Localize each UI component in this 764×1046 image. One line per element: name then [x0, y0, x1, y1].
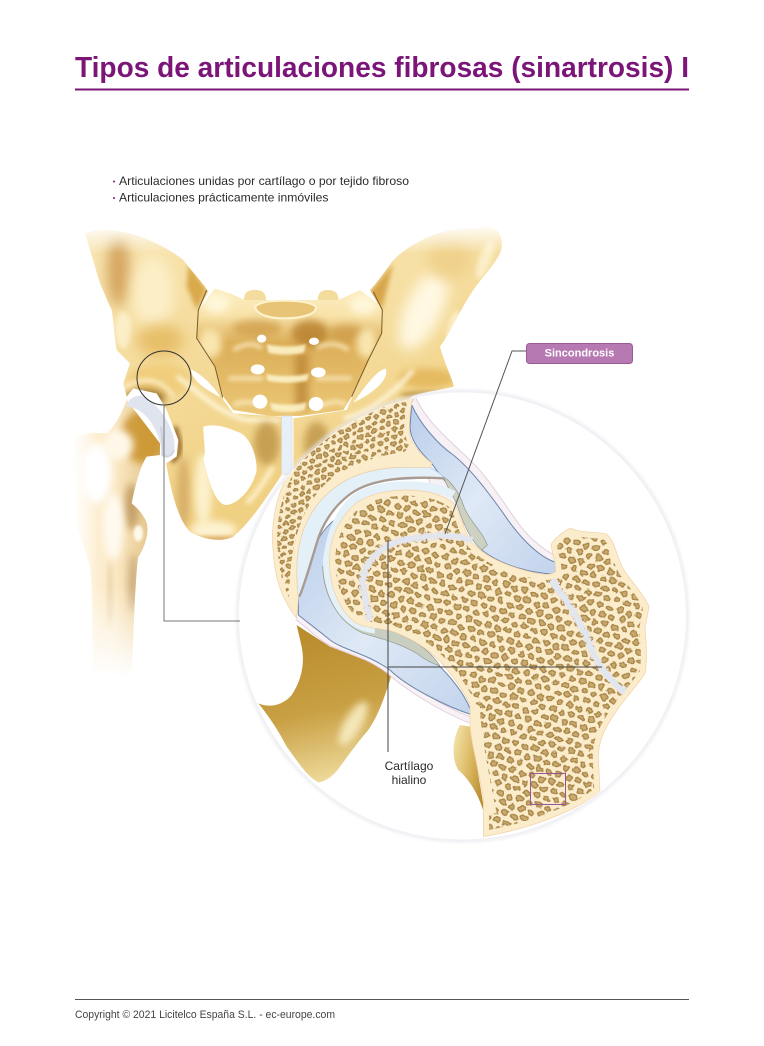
- left hip bone: [85, 230, 282, 540]
- connector: locator to zoom circle: [164, 405, 240, 621]
- ischium section: [258, 625, 392, 782]
- pubic symphysis cartilage: [282, 416, 292, 475]
- footer: Copyright © 2021 Licitelco España S.L. - ec-europe.com: [75, 1009, 335, 1021]
- title: Tipos de articulaciones fibrosas (sinartrosis) I: [75, 52, 689, 84]
- femoral head cartilage: [327, 486, 453, 629]
- label: cartilago hialino: hialino: [392, 773, 427, 787]
- sacral foramina: [251, 335, 326, 411]
- left sacroiliac gap: [191, 369, 221, 397]
- lesser trochanter: [454, 725, 483, 810]
- capsule upper outline: [407, 396, 558, 567]
- synovial lower: [323, 563, 440, 666]
- label: cartilago hialino: Cartílago: [385, 759, 434, 773]
- connector: sincondrosis: [445, 351, 526, 534]
- pelvis and femur illustration: [70, 220, 513, 683]
- zoom circle: [238, 392, 687, 840]
- label: cartilago hialino: [385, 759, 434, 787]
- detail square: [530, 774, 566, 804]
- bullet list: [113, 174, 409, 204]
- capsule lower outline: [297, 617, 470, 720]
- upper ligament: [410, 405, 557, 574]
- acetabular cartilage: [297, 467, 444, 598]
- femur bone section: [323, 487, 657, 840]
- synovial upper: [443, 477, 487, 550]
- bullet list: Articulaciones unidas por cartílago o por tejido fibroso: [119, 174, 409, 188]
- sacrum: [193, 287, 387, 420]
- femoral head cartilage: [126, 396, 174, 457]
- joint cross-section: [258, 393, 657, 840]
- growth plate trochanter: [552, 580, 625, 693]
- joint line: [299, 478, 443, 597]
- sacrum outline: [197, 290, 382, 397]
- left femur: [78, 400, 160, 668]
- locator circle on hip: [137, 351, 191, 405]
- growth plate head: [363, 536, 472, 621]
- connector: cartilago hialino: [388, 540, 602, 752]
- label: sincondrosis: [526, 344, 632, 364]
- acetabular bone: [272, 398, 432, 619]
- right hip bone: [293, 227, 502, 470]
- right sacroiliac gap: [353, 369, 386, 403]
- sacral facets: [244, 290, 339, 301]
- lower ligament: [298, 518, 472, 715]
- sacral canal: [255, 301, 316, 318]
- ischium highlight: [333, 697, 373, 749]
- label: sincondrosis: Sincondrosis: [545, 348, 614, 360]
- bullet list: Articulaciones prácticamente inmóviles: [119, 190, 328, 204]
